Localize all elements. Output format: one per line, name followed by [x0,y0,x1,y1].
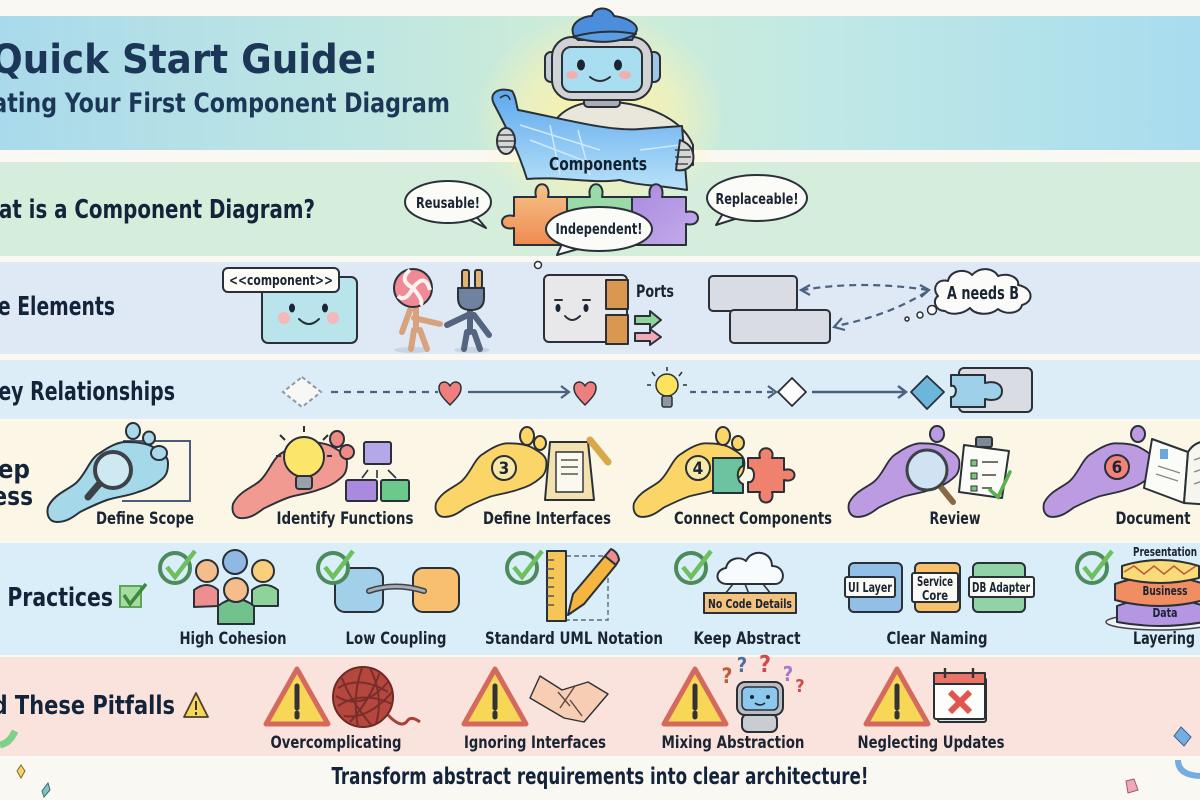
speech bubble: reusable [405,181,491,228]
panel: best practices [0,543,1200,655]
step 3: define interfaces: Define Interfaces [483,509,611,529]
step 6: document [1044,426,1200,529]
robot head [545,37,660,100]
title: Quick Start Guide: [0,37,378,83]
pitfall: mixing abstraction: ? [783,662,793,686]
panel: six step process [0,421,1200,541]
practice: low coupling [318,551,459,649]
pitfall: neglecting updates: Neglecting Updates [858,733,1004,753]
pitfall: neglecting updates [858,668,1004,753]
dependency boxes and thought cloud [709,269,1031,343]
blueprint label: Components [549,154,647,175]
pitfall: overcomplicating [266,667,420,753]
dependency boxes and thought cloud: A needs B [947,283,1019,304]
practice: clear naming: UI Layer [848,581,892,596]
practice: clear naming: Core [922,589,948,604]
step 4: connect components [634,427,832,529]
practice: layering: Data [1152,605,1178,620]
robot body [547,101,693,165]
step 1: define scope [47,423,194,529]
thought dot [534,262,542,268]
speech bubble: independent: Independent! [556,220,642,238]
step 4: connect components: Connect Components [674,509,832,529]
practice: clear naming [845,563,1034,649]
speech bubble: reusable: Reusable! [416,194,480,212]
practice: clear naming: Service [917,575,953,590]
component character: <<component>> [229,273,333,289]
practice: clear naming: Clear Naming [886,629,988,649]
puzzle pieces [502,184,698,245]
pitfall: mixing abstraction: ? [795,676,805,697]
confetti decorations [0,727,1200,797]
heading [0,455,33,512]
pitfall: overcomplicating: Overcomplicating [270,733,402,753]
pitfall: mixing abstraction [662,652,805,753]
panel: what is a component diagram [0,162,1200,256]
practice: clear naming: DB Adapter [972,581,1030,596]
blueprint [492,90,693,190]
step 5: review: Review [930,509,980,529]
component with ports: Ports [636,282,674,302]
step 2: identify functions [233,426,414,529]
hero illustration: robot with blueprint and puzzle pieces [405,8,807,268]
step 1: define scope: Define Scope [96,509,194,529]
speech bubble: independent [546,207,652,255]
robot hat [572,8,637,42]
glow [475,13,725,223]
component with ports [544,275,674,345]
step 2: identify functions: Identify Functions [276,509,414,529]
step 5: review [849,426,1010,529]
pitfall: mixing abstraction: ? [737,653,747,677]
practice: layering [1077,544,1200,649]
relationship notation row [283,367,1032,412]
practice: keep abstract: No Code Details [708,596,792,611]
practice: keep abstract [676,551,800,649]
practice: standard uml notation: Standard UML Notation [485,629,663,649]
step 6: document: 6 [1112,458,1122,478]
pitfall: mixing abstraction: ? [759,652,771,678]
icon: green check box [120,584,146,607]
tagline: Transform abstract requirements into clear architecture! [332,764,868,790]
practice: standard uml notation [485,549,663,649]
pitfall: mixing abstraction: Mixing Abstraction [662,733,804,753]
step 3: define interfaces [436,427,611,529]
icon: small warning [184,693,208,717]
panel: footer tagline [0,756,1200,800]
panel: key relationships [0,360,1200,419]
panel: title banner [0,16,1200,150]
speech bubble: replaceable [707,175,807,225]
step 3: define interfaces: 3 [499,459,509,479]
practice: high cohesion: High Cohesion [180,629,286,649]
step 4: connect components: 4 [693,459,703,479]
practice: low coupling: Low Coupling [346,629,446,649]
panel: core elements [0,262,1200,354]
panel: avoid these pitfalls [0,652,1200,756]
speech bubble: replaceable: Replaceable! [716,190,798,208]
component character [223,268,357,343]
practice: high cohesion [160,550,286,649]
icon: lollipop and plug shaking hands [394,269,490,353]
pitfall: mixing abstraction: ? [722,664,732,688]
practice: keep abstract: Keep Abstract [694,629,800,649]
practice: layering: Business [1142,583,1188,598]
pitfall: ignoring interfaces [464,669,608,753]
pitfall: ignoring interfaces: Ignoring Interfaces [464,733,606,753]
